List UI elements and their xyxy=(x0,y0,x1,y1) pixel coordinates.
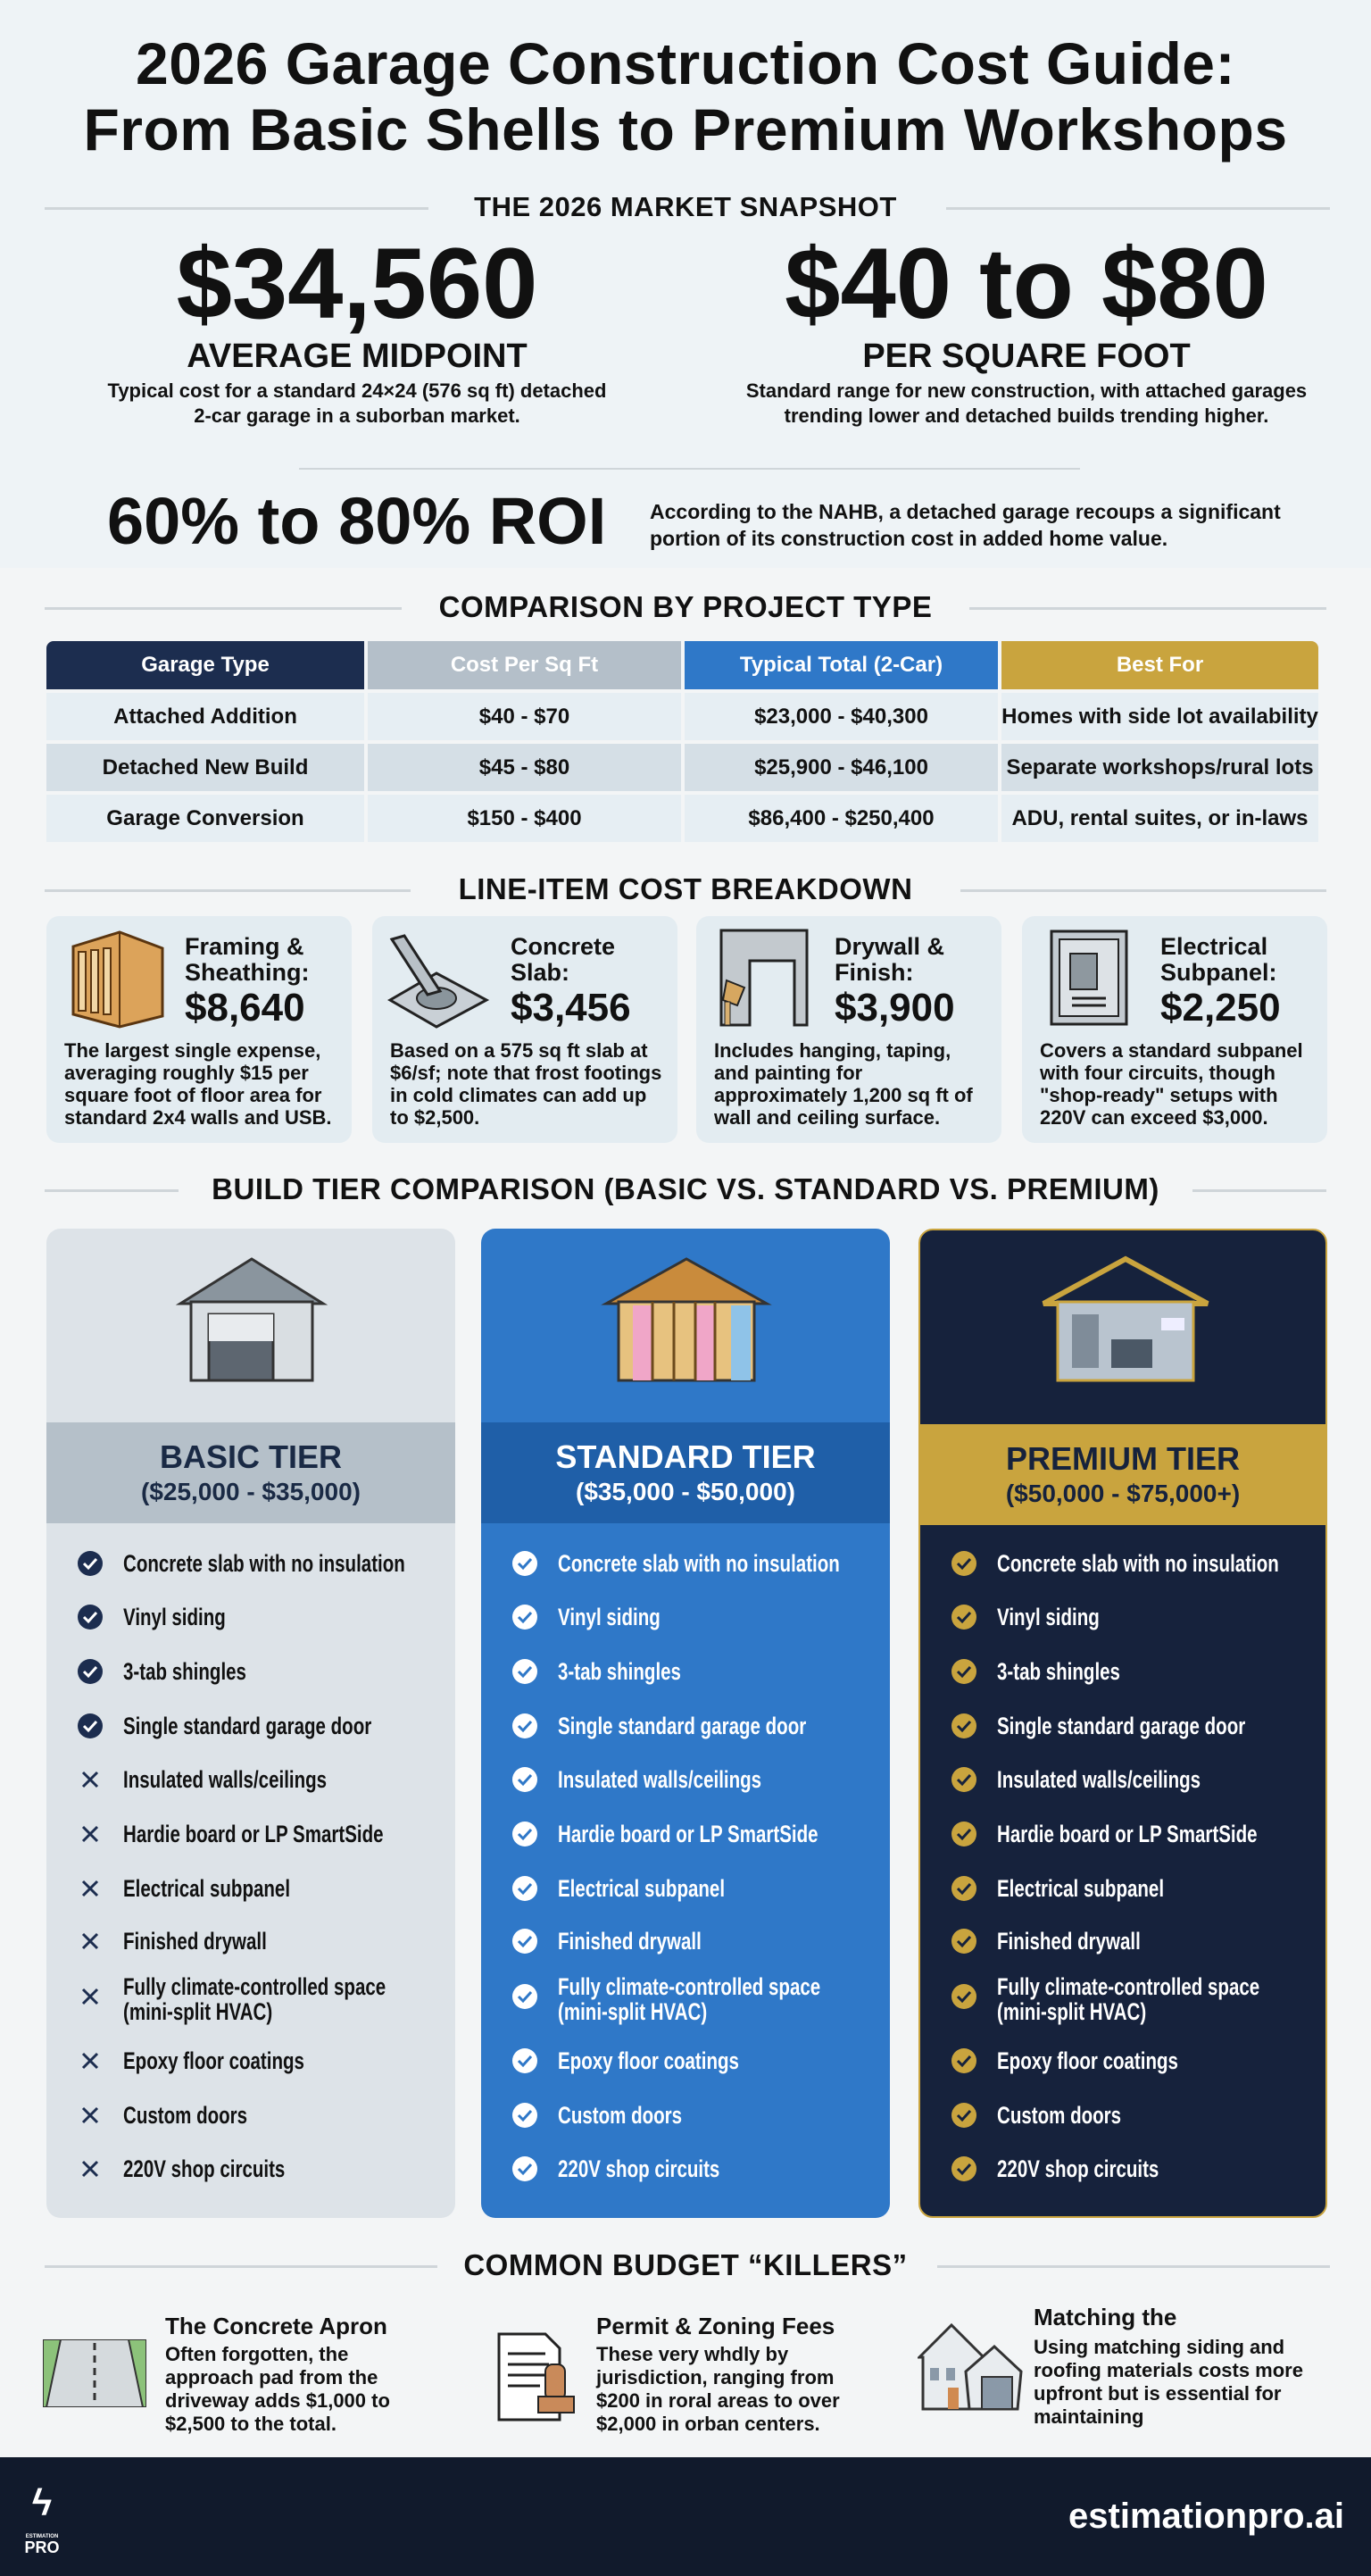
panel: basic tier: Hardie board or LP SmartSide xyxy=(123,1821,384,1847)
panel: premium tier: Electrical subpanel xyxy=(997,1875,1164,1902)
panel: basic tier: 3-tab shingles xyxy=(123,1658,246,1685)
stat: average midpoint: AVERAGE MIDPOINT xyxy=(187,338,528,375)
comparison table: $86,400 - $250,400 xyxy=(748,805,935,830)
logo: PRO xyxy=(24,2538,59,2556)
panel: standard tier: Electrical subpanel xyxy=(558,1875,725,1902)
panel: premium tier: ($50,000 - $75,000+) xyxy=(1006,1480,1240,1507)
heading: market snapshot: THE 2026 MARKET SNAPSHOT xyxy=(474,191,897,222)
panel: premium tier xyxy=(918,1229,1327,2218)
killer: matching materials xyxy=(918,2304,1303,2428)
stat: per square foot: $40 to $80 xyxy=(785,228,1268,339)
card: electrical: Covers a standard subpanel with four circuits, though "shop-ready" setups with 220V can exceed $3,000. xyxy=(1040,1039,1303,1129)
footer url: estimationpro.ai xyxy=(1068,2497,1344,2536)
comparison table: Cost Per Sq Ft xyxy=(451,653,598,677)
comparison table xyxy=(46,641,1318,842)
comparison table: $25,900 - $46,100 xyxy=(754,755,928,779)
card: electrical xyxy=(1022,916,1327,1143)
card: framing: The largest single expense, averaging roughly $15 per square foot of floor area for standard 2x4 walls and USB. xyxy=(64,1039,332,1129)
logo xyxy=(24,2481,59,2556)
comparison table: $23,000 - $40,300 xyxy=(754,704,928,729)
heading: line-item: LINE-ITEM COST BREAKDOWN xyxy=(459,872,912,905)
stat: per square foot: trending lower and detached builds trending higher. xyxy=(785,404,1268,427)
panel: premium tier: (mini-split HVAC) xyxy=(997,1998,1146,2025)
card: drywall: Includes hanging, taping, and painting for approximately 1,200 sq ft of wall and ceiling surface. xyxy=(714,1039,973,1129)
killer: permit fees: These very whdly by jurisdiction, ranging from $200 in roral areas to over $2,000 in orban centers. xyxy=(596,2343,840,2435)
panel: premium tier: 3-tab shingles xyxy=(997,1658,1120,1685)
card: electrical: $2,250 xyxy=(1160,986,1281,1030)
icon: premium workshop xyxy=(1043,1255,1209,1382)
comparison table: Attached Addition xyxy=(113,704,297,729)
panel: premium tier: Insulated walls/ceilings xyxy=(997,1766,1201,1793)
panel: standard tier: Vinyl siding xyxy=(558,1604,661,1630)
panel: basic tier: Epoxy floor coatings xyxy=(123,2047,304,2074)
panel: basic tier: Insulated walls/ceilings xyxy=(123,1766,327,1793)
title: From Basic Shells to Premium Workshops xyxy=(83,96,1288,163)
panel: standard tier: Insulated walls/ceilings xyxy=(558,1766,761,1793)
panel: standard tier: 3-tab shingles xyxy=(558,1658,681,1685)
comparison table: Detached New Build xyxy=(103,755,308,779)
comparison table: Garage Conversion xyxy=(106,805,304,830)
killer: permit fees: Permit & Zoning Fees xyxy=(596,2313,835,2339)
panel: basic tier: Vinyl siding xyxy=(123,1604,226,1630)
panel: basic tier: Concrete slab with no insulation xyxy=(123,1550,405,1577)
card: framing: Framing & xyxy=(185,933,304,960)
icon: house xyxy=(918,2323,1023,2411)
heading: comparison: COMPARISON BY PROJECT TYPE xyxy=(439,590,932,623)
icon: apron road xyxy=(43,2339,146,2407)
comparison table: $150 - $400 xyxy=(467,805,582,830)
panel: standard tier: Epoxy floor coatings xyxy=(558,2047,739,2074)
killer: concrete apron xyxy=(43,2313,390,2435)
comparison table: Garage Type xyxy=(141,653,270,677)
panel: basic tier: Finished drywall xyxy=(123,1928,267,1955)
top snapshot background xyxy=(0,0,1371,568)
heading: budget killers: COMMON BUDGET “KILLERS” xyxy=(463,2248,908,2281)
comparison table: Homes with side lot availability xyxy=(1001,704,1318,729)
card: concrete: Slab: xyxy=(511,959,569,986)
panel: standard tier: STANDARD TIER xyxy=(555,1438,816,1475)
icon: concrete xyxy=(387,934,489,1029)
stat: average midpoint: 2-car garage in a suborban market. xyxy=(194,404,520,427)
icon: electrical panel xyxy=(1050,930,1128,1025)
stat: per square foot: Standard range for new construction, with attached garages xyxy=(746,379,1307,402)
stat: per square foot xyxy=(746,228,1307,427)
logo: ϟ xyxy=(32,2481,52,2523)
icon: basic garage xyxy=(175,1257,328,1382)
card: drywall xyxy=(696,916,1001,1143)
panel: standard tier xyxy=(481,1229,890,2218)
panel: premium tier: 220V shop circuits xyxy=(997,2155,1159,2182)
comparison table: $40 - $70 xyxy=(479,704,569,729)
killer: matching materials: Matching the xyxy=(1034,2304,1176,2330)
icon: framed garage xyxy=(601,1257,772,1382)
ROI description: portion of its construction cost in added home value. xyxy=(650,527,1167,550)
panel: premium tier: Vinyl siding xyxy=(997,1604,1100,1630)
killer: concrete apron: Often forgotten, the approach pad from the driveway adds $1,000 to $2,500 to the total. xyxy=(165,2343,390,2435)
card: concrete: Based on a 575 sq ft slab at $6/sf; note that frost footings in cold climates can add up to $2,500. xyxy=(390,1039,661,1129)
card: drywall: Drywall & xyxy=(835,933,944,960)
ROI description: According to the NAHB, a detached garage recoups a significant xyxy=(650,500,1281,523)
card: electrical: Electrical xyxy=(1160,933,1267,960)
card: drywall: $3,900 xyxy=(835,986,955,1030)
panel: premium tier: Hardie board or LP SmartSide xyxy=(997,1821,1258,1847)
panel: basic tier: Single standard garage door xyxy=(123,1713,371,1739)
stat: ROI: 60% to 80% ROI xyxy=(107,484,606,558)
killer: matching materials: Using matching siding and roofing materials costs more upfront but is essential for maintaining xyxy=(1034,2336,1303,2428)
comparison table: $45 - $80 xyxy=(479,755,569,779)
comparison table: ADU, rental suites, or in-laws xyxy=(1011,805,1309,830)
stat: average midpoint xyxy=(107,228,606,427)
panel: basic tier: Custom doors xyxy=(123,2102,247,2129)
panel: basic tier: 220V shop circuits xyxy=(123,2155,285,2182)
panel: standard tier: Fully climate-controlled space xyxy=(558,1973,820,2000)
panel: premium tier: Epoxy floor coatings xyxy=(997,2047,1178,2074)
panel: basic tier: Electrical subpanel xyxy=(123,1875,290,1902)
panel: standard tier: Custom doors xyxy=(558,2102,682,2129)
card: framing: $8,640 xyxy=(185,986,305,1030)
card: drywall: Finish: xyxy=(835,959,914,986)
panel: premium tier: Concrete slab with no insulation xyxy=(997,1550,1279,1577)
panel: premium tier: Custom doors xyxy=(997,2102,1121,2129)
killer: permit fees xyxy=(498,2313,840,2435)
panel: premium tier: PREMIUM TIER xyxy=(1006,1440,1240,1477)
card: concrete: Concrete xyxy=(511,933,615,960)
card: framing xyxy=(46,916,352,1143)
stat: average midpoint: $34,560 xyxy=(177,228,537,339)
panel: basic tier: Fully climate-controlled space xyxy=(123,1973,386,2000)
footer xyxy=(0,2457,1371,2576)
title xyxy=(83,30,1288,163)
logo: ESTIMATION xyxy=(26,2534,58,2539)
panel: basic tier xyxy=(46,1229,455,2218)
panel: basic tier: ($25,000 - $35,000) xyxy=(141,1478,361,1505)
stat: per square foot: PER SQUARE FOOT xyxy=(862,338,1191,375)
panel: premium tier: Single standard garage door xyxy=(997,1713,1245,1739)
panel: standard tier: Concrete slab with no insulation xyxy=(558,1550,840,1577)
title: 2026 Garage Construction Cost Guide: xyxy=(136,30,1235,96)
card: concrete: $3,456 xyxy=(511,986,631,1030)
card: framing: Sheathing: xyxy=(185,959,309,986)
panel: standard tier: Hardie board or LP SmartSide xyxy=(558,1821,818,1847)
icon: framing xyxy=(71,930,164,1029)
icon: drywall xyxy=(719,929,809,1027)
icon: permit document xyxy=(498,2332,575,2422)
panel: standard tier: (mini-split HVAC) xyxy=(558,1998,707,2025)
killer: concrete apron: The Concrete Apron xyxy=(165,2313,387,2339)
card: electrical: Subpanel: xyxy=(1160,959,1277,986)
panel: standard tier: Finished drywall xyxy=(558,1928,702,1955)
panel: premium tier: Finished drywall xyxy=(997,1928,1141,1955)
heading: build tier: BUILD TIER COMPARISON (BASIC VS. STANDARD VS. PREMIUM) xyxy=(212,1172,1159,1205)
comparison table: Best For xyxy=(1117,653,1203,677)
panel: standard tier: 220V shop circuits xyxy=(558,2155,719,2182)
stat: average midpoint: Typical cost for a standard 24×24 (576 sq ft) detached xyxy=(108,379,606,402)
card: concrete xyxy=(372,916,677,1143)
panel: premium tier: Fully climate-controlled space xyxy=(997,1973,1259,2000)
ROI description xyxy=(650,500,1281,550)
comparison table: Separate workshops/rural lots xyxy=(1006,755,1314,779)
panel: basic tier: (mini-split HVAC) xyxy=(123,1998,272,2025)
panel: basic tier: BASIC TIER xyxy=(160,1438,342,1475)
panel: standard tier: Single standard garage door xyxy=(558,1713,806,1739)
comparison table: Typical Total (2-Car) xyxy=(740,653,943,677)
panel: standard tier: ($35,000 - $50,000) xyxy=(576,1478,795,1505)
